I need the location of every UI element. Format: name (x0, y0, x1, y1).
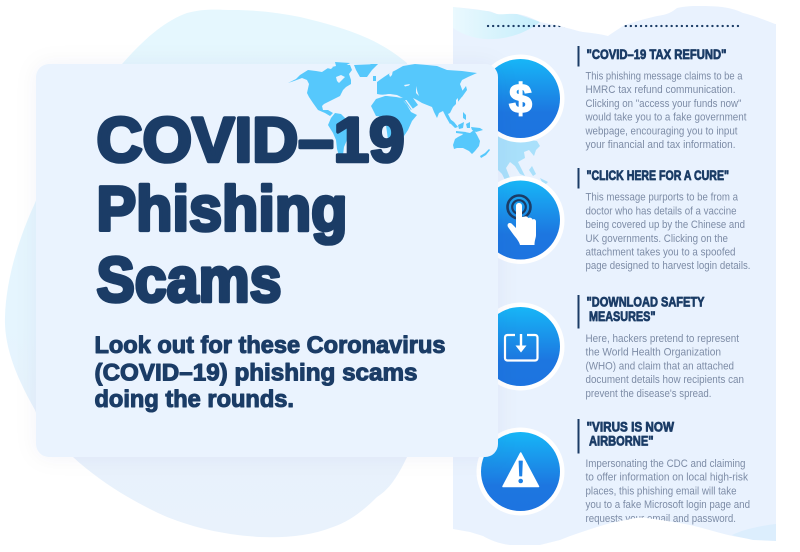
world map (288, 62, 490, 163)
australia (453, 130, 480, 154)
scam 3: download safety measures: MEASURES" (589, 309, 656, 324)
africa (371, 96, 417, 152)
scam 3: download safety measures (578, 294, 744, 400)
subtitle: Look out for these Coronavirus (94, 332, 446, 359)
main title (96, 105, 404, 315)
scam 4: virus now airborne: Impersonating the CDC and claiming (586, 458, 746, 470)
main title: COVID–19 (96, 105, 404, 175)
main title: Phishing (96, 174, 348, 244)
scam 3: download safety measures: "DOWNLOAD SAFETY (586, 294, 705, 309)
japan (459, 86, 467, 99)
icon: warning circle (476, 428, 564, 516)
greenland (354, 64, 378, 77)
icon: download circle (476, 302, 564, 390)
torn paper edges (450, 0, 780, 552)
scam 4: virus now airborne (578, 419, 750, 525)
scam 1: tax refund: HMRC tax refund communication. (586, 84, 736, 96)
dotted rule (488, 25, 740, 27)
scam 1: tax refund: Clicking on "access your funds now" (586, 98, 742, 110)
scam 1: tax refund: "COVID–19 TAX REFUND" (586, 47, 726, 62)
right panel: phishing scam list (453, 6, 776, 546)
subtitle: doing the rounds. (94, 386, 294, 413)
scam 2: click for a cure: This message purports to be from a (586, 192, 738, 204)
subtitle: (COVID–19) phishing scams (94, 360, 418, 386)
scam 4: virus now airborne: "VIRUS IS NOW (586, 419, 674, 434)
new zealand (480, 149, 490, 158)
title card (36, 64, 498, 457)
scam 2: click for a cure: attachment takes you to a spoofed (586, 246, 736, 258)
scam 1: tax refund: webpage, encouraging you to input (585, 125, 738, 137)
scam 2: click for a cure: being covered up by the Chinese and (586, 219, 745, 231)
scam 1: tax refund: This phishing message claims to be a (586, 70, 743, 82)
southeast asia islands (450, 112, 483, 134)
icon: dollar circle (476, 54, 564, 142)
scam 2: click for a cure (578, 168, 750, 272)
icon: click hand circle (476, 176, 564, 264)
scam 3: download safety measures: prevent the disease's spread. (586, 388, 712, 400)
north america (288, 65, 352, 116)
britain (373, 76, 376, 81)
scam 4: virus now airborne: places, this phishing email will take (586, 485, 737, 497)
panel corner tint (453, 7, 540, 39)
faint map corner (732, 524, 776, 541)
icon: dollar circle: $ (509, 76, 532, 122)
scam 2: click for a cure: "CLICK HERE FOR A CURE" (586, 168, 729, 183)
scam 1: tax refund: your financial and tax information. (586, 139, 736, 151)
scam 3: download safety measures: document details how recipients can (586, 374, 744, 386)
scam 1: tax refund (578, 46, 747, 151)
main title: Scams (96, 245, 282, 315)
scam 4: virus now airborne: to offer information on local high-risk (586, 472, 749, 484)
scam 3: download safety measures: the World Health Organization (586, 347, 721, 359)
scam 4: virus now airborne: requests your email and password. (586, 513, 736, 525)
scam 4: virus now airborne: you to a fake Microsoft login page and (586, 499, 750, 511)
faint map: Asia (498, 134, 548, 186)
eurasia (377, 64, 477, 124)
subtitle (94, 332, 446, 413)
scam 2: click for a cure: UK governments. Clicking on the (586, 233, 728, 245)
background blob (5, 10, 407, 537)
scam 4: virus now airborne: AIRBORNE" (589, 434, 654, 449)
scam 2: click for a cure: page designed to harvest login details. (586, 260, 750, 272)
scam 2: click for a cure: doctor who has details of a vaccine (586, 205, 737, 217)
scam 3: download safety measures: (WHO) and claim that an attached (586, 360, 734, 372)
scam 1: tax refund: would take you to a fake government (585, 112, 747, 124)
scam 3: download safety measures: Here, hackers pretend to represent (586, 333, 739, 345)
south america (328, 113, 351, 163)
inland water cut-outs (325, 66, 458, 113)
arctic islands (335, 62, 378, 66)
